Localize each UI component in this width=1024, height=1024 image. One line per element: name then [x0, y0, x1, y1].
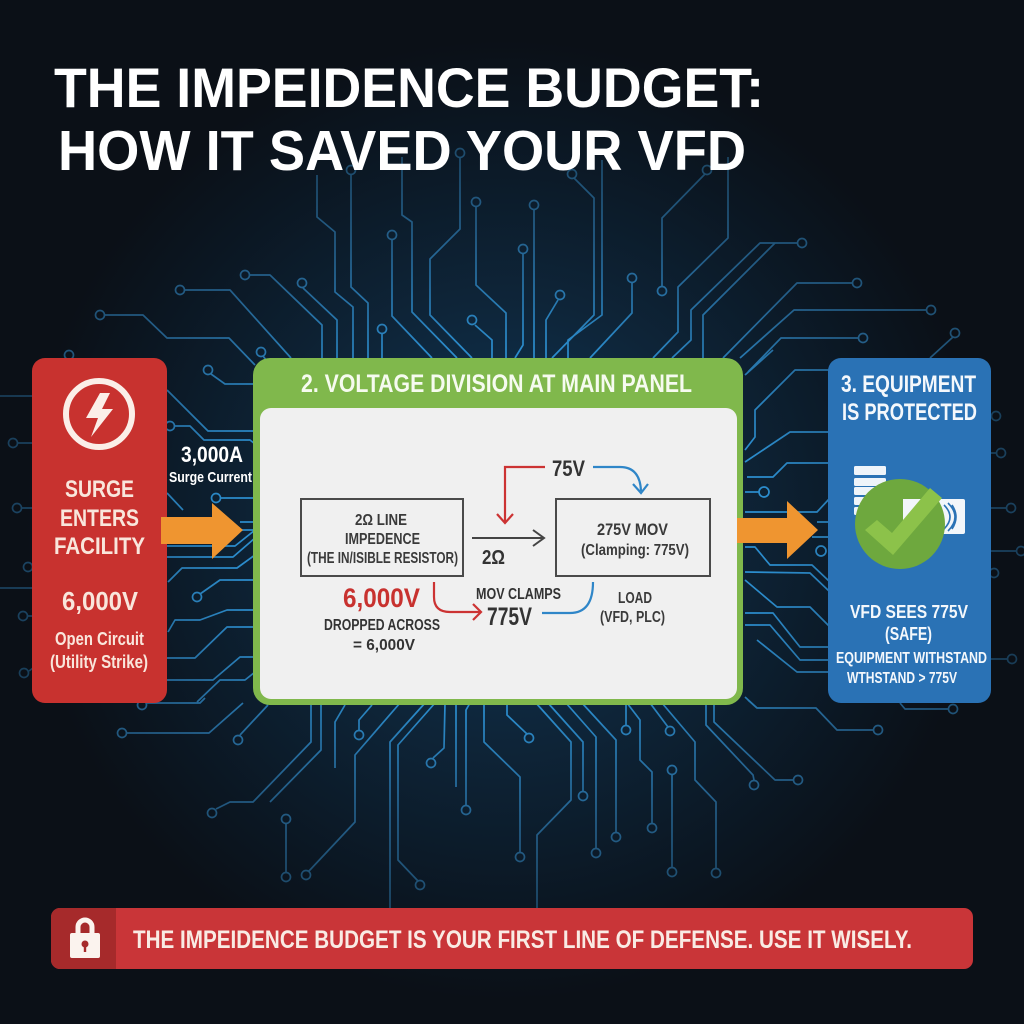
label: surge current: Surge Current — [169, 469, 252, 486]
icon: green check — [855, 479, 945, 569]
value: 6,000V dropped across: DROPPED ACROSS — [324, 617, 440, 634]
heading: surge enters facility — [54, 476, 145, 560]
value: 6,000V: 6,000V — [62, 586, 139, 616]
panel: voltage division at main panel — [253, 358, 743, 705]
arrow: line to MOV — [472, 530, 544, 546]
value: 6,000V dropped across: 6,000V — [343, 583, 420, 613]
label: 2 ohm: 2Ω — [482, 547, 505, 569]
icon: lightning bolt in circle — [66, 381, 132, 447]
title — [54, 56, 764, 183]
arrow: red to clamp — [434, 582, 481, 620]
label: 75V: 75V — [552, 456, 585, 481]
value: MOV clamps 775V — [476, 586, 561, 631]
text: VFD sees 775V: (SAFE) — [885, 624, 932, 644]
heading: voltage division: 2. VOLTAGE DIVISION AT MAIN PANEL — [301, 370, 692, 398]
title: HOW IT SAVED YOUR VFD — [58, 119, 746, 183]
icon: padlock — [70, 920, 100, 958]
icon: motor drive — [903, 499, 965, 534]
arrow: panel to equipment — [737, 501, 818, 559]
note: open circuit: (Utility Strike) — [50, 652, 148, 672]
label: load — [600, 590, 665, 626]
note: open circuit — [50, 629, 148, 672]
text: equipment withstand — [836, 650, 987, 687]
value: 6,000V dropped across: = 6,000V — [353, 637, 415, 654]
box: line impedence — [301, 499, 463, 576]
arrow: blue clamp to MOV — [542, 582, 593, 613]
heading: equipment is protected — [841, 371, 977, 426]
label: surge current: 3,000A — [181, 442, 243, 467]
box: line impedence: 2Ω LINE — [355, 512, 407, 529]
text: equipment withstand: WTHSTAND > 775V — [847, 670, 957, 687]
box: line impedence: IMPEDENCE — [345, 531, 420, 548]
arrow: surge into panel — [161, 503, 243, 559]
box: line impedence: (THE IN/ISIBLE RESISTOR) — [307, 550, 458, 567]
heading: equipment is protected: 3. EQUIPMENT — [841, 371, 976, 398]
arrow: blue 75V to MOV — [593, 467, 648, 493]
heading: equipment is protected: IS PROTECTED — [842, 399, 977, 426]
label: load: (VFD, PLC) — [600, 609, 665, 626]
circuit board trace background — [0, 148, 1024, 908]
value: MOV clamps 775V: 775V — [487, 603, 532, 631]
arrow: red 75V down — [497, 467, 545, 523]
heading: surge enters facility: FACILITY — [54, 533, 145, 560]
value: 6,000V dropped across — [324, 583, 440, 654]
note: open circuit: Open Circuit — [55, 629, 144, 649]
heading: surge enters facility: ENTERS — [60, 505, 139, 532]
panel: surge enters facility — [32, 358, 167, 703]
box: 275V MOV: 275V MOV — [597, 520, 669, 539]
title: THE IMPEIDENCE BUDGET: — [54, 56, 764, 119]
panel: equipment is protected — [828, 358, 991, 703]
value: MOV clamps 775V: MOV CLAMPS — [476, 586, 561, 603]
label: surge current — [169, 442, 252, 486]
heading: surge enters facility: SURGE — [65, 476, 134, 503]
box: 275V MOV: (Clamping: 775V) — [581, 542, 689, 559]
banner: first line of defense — [51, 908, 973, 969]
icon: server rack — [854, 466, 886, 515]
box: 275V MOV — [556, 499, 710, 576]
label: load: LOAD — [618, 590, 652, 607]
text: VFD sees 775V: VFD SEES 775V — [850, 602, 968, 622]
text: VFD sees 775V — [850, 602, 968, 644]
